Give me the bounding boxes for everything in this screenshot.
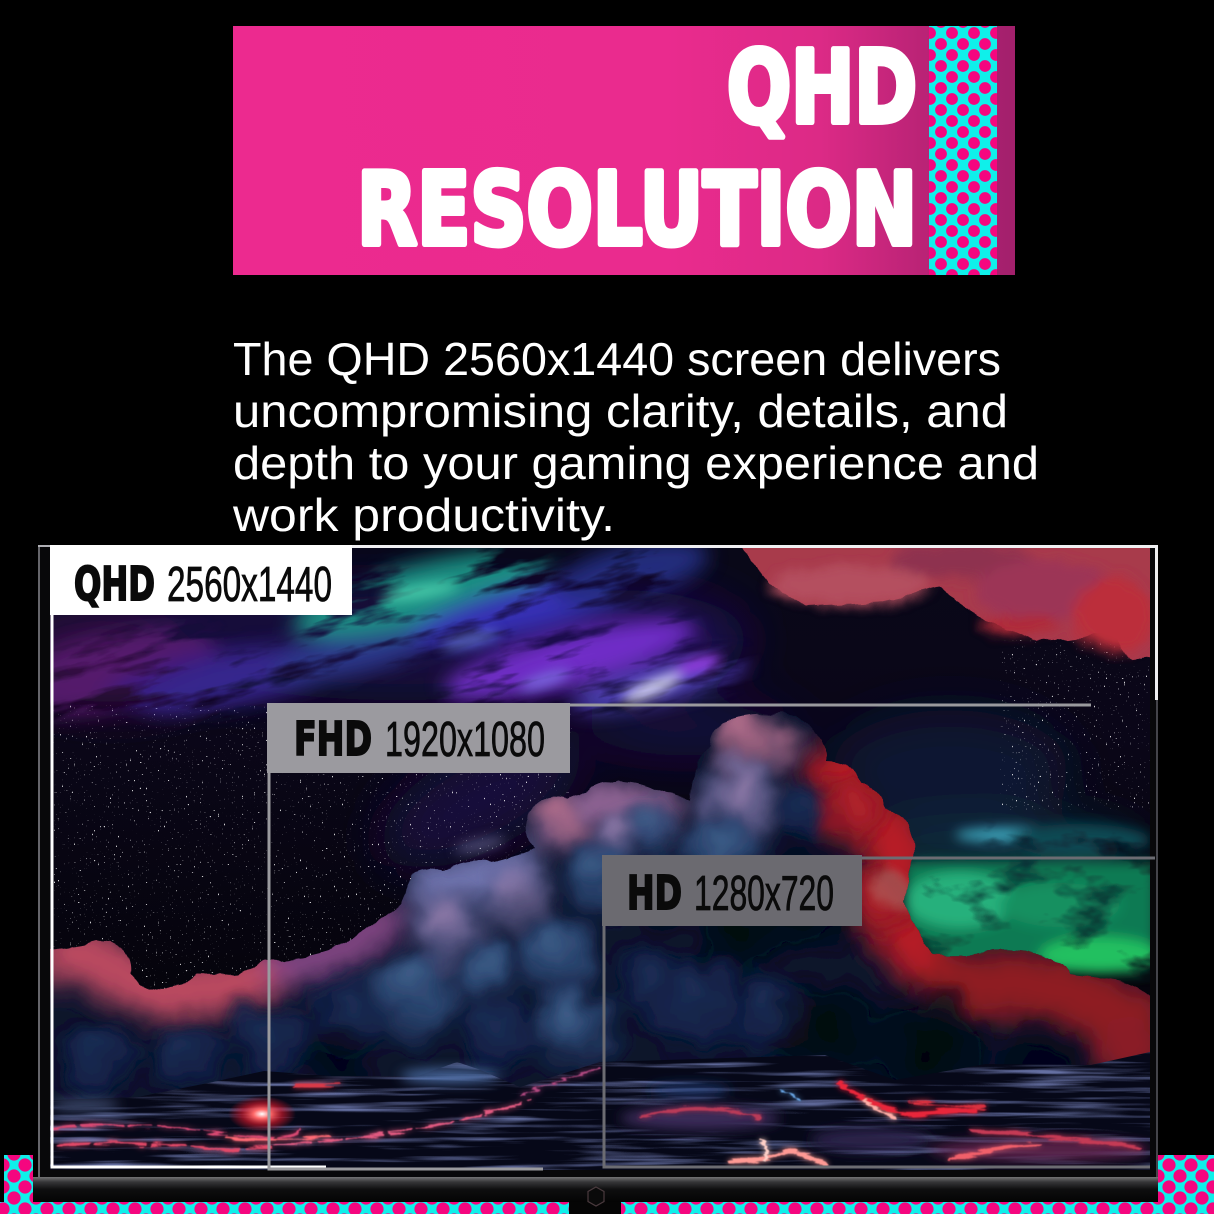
lava flare bbox=[228, 1096, 296, 1132]
top right red cloud bbox=[735, 540, 1165, 659]
monitor base bezel bbox=[33, 1177, 1158, 1202]
QHD resolution frame bbox=[50, 545, 1156, 1167]
title line: QHD: QHD bbox=[727, 29, 917, 146]
nebula bright highlights bbox=[379, 578, 724, 855]
screen artwork bbox=[50, 548, 1150, 1170]
stars left bbox=[52, 705, 572, 995]
QHD label bbox=[50, 545, 352, 615]
polka dot stripe bbox=[929, 26, 997, 275]
HD label: HD bbox=[627, 866, 682, 920]
title banner bbox=[233, 26, 1015, 275]
HD label: 1280x720 bbox=[694, 867, 834, 921]
FHD label: FHD bbox=[294, 712, 372, 766]
logo bbox=[588, 1187, 604, 1206]
description text bbox=[232, 333, 1039, 541]
monitor bbox=[33, 545, 1158, 1214]
green nebula base glow bbox=[915, 870, 1150, 960]
sea waves bbox=[50, 1052, 1150, 1170]
cloud puffs bbox=[50, 699, 1095, 1125]
sea colour patches bbox=[50, 1069, 1150, 1161]
FHD label bbox=[267, 703, 570, 773]
sky haze left and right bbox=[0, 580, 1140, 896]
FHD label: 1920x1080 bbox=[385, 713, 545, 767]
stars right bbox=[1000, 640, 1150, 810]
title line: RESOLUTION: RESOLUTION bbox=[357, 151, 917, 268]
FHD resolution frame bbox=[267, 703, 1091, 1169]
description text: uncompromising clarity, details, and bbox=[233, 385, 1008, 437]
lava streaks bbox=[52, 1068, 1140, 1165]
polka dot strip behind monitor bbox=[0, 1155, 1214, 1214]
stand neck bbox=[569, 1202, 621, 1214]
HD resolution frame bbox=[602, 855, 1155, 1167]
description text: work productivity. bbox=[232, 489, 615, 541]
teal and green nebula bbox=[905, 824, 1160, 973]
HD label bbox=[602, 855, 862, 926]
QHD label: 2560x1440 bbox=[167, 558, 332, 612]
QHD label: QHD bbox=[74, 557, 155, 611]
cloud rim glows bbox=[40, 750, 1170, 1084]
nebula streaks bbox=[50, 548, 756, 727]
description text: depth to your gaming experience and bbox=[233, 437, 1039, 489]
description text: The QHD 2560x1440 screen delivers bbox=[233, 333, 1001, 385]
cloud mass bbox=[50, 711, 1150, 1100]
